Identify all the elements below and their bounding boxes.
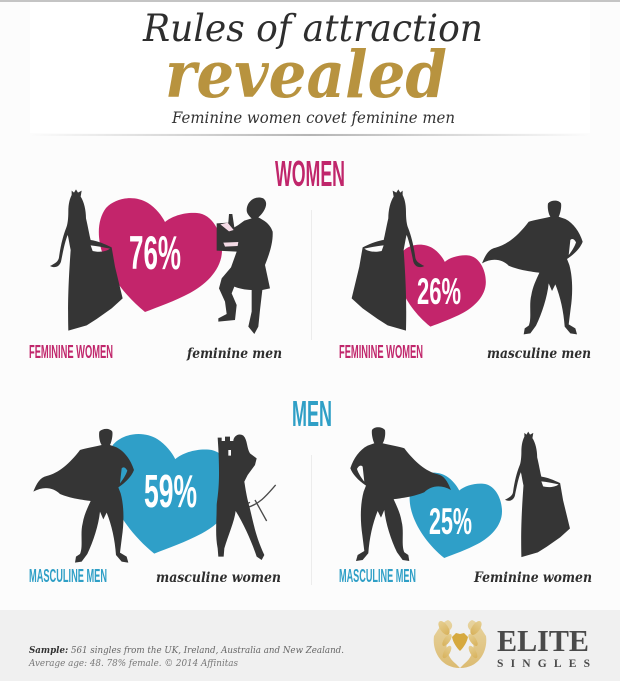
heading: men: MEN <box>292 393 332 434</box>
footer note: Average age: 48. 78% female. © 2014 Affinitas <box>28 658 238 669</box>
label: masculine men: masculine men <box>487 346 591 362</box>
label: feminine men: feminine men <box>186 346 282 362</box>
subtitle: Feminine women covet feminine men <box>171 109 455 127</box>
title <box>142 7 483 113</box>
icon: queen silhouette <box>505 432 570 557</box>
header band <box>0 0 620 136</box>
footer band <box>0 610 620 681</box>
panel: feminine women and masculine men 26% <box>339 189 591 362</box>
heart: 59% <box>106 434 235 554</box>
value: 25%: 25% <box>429 501 472 542</box>
icon: queen silhouette mirrored <box>352 189 424 331</box>
footer note: Sample: 561 singles from the UK, Ireland, Australia and New Zealand. <box>29 645 344 656</box>
value: 26%: 26% <box>417 271 461 312</box>
icon: caped hero silhouette <box>33 429 134 563</box>
footer note <box>28 645 344 669</box>
logo: elite singles <box>434 619 590 670</box>
title: Rules of attraction <box>142 7 483 50</box>
panel: masculine men and masculine women 59% <box>29 429 281 586</box>
panel: masculine men and feminine women 25% <box>339 427 592 586</box>
label: masculine women: masculine women <box>156 570 281 586</box>
value: 59%: 59% <box>144 465 197 517</box>
heart: 26% <box>397 245 486 327</box>
icon: minstrel silhouette <box>217 197 273 334</box>
label: feminine women: Feminine women <box>473 570 592 586</box>
icon: caped hero silhouette mirrored <box>350 427 451 561</box>
label: feminine women: FEMININE WOMEN <box>339 342 423 362</box>
panel: feminine women and feminine men 76% <box>29 189 282 362</box>
heart: 25% <box>410 473 502 558</box>
icon: gold laurel wreath <box>434 619 486 668</box>
icon: queen silhouette <box>50 189 123 331</box>
logo wordmark: ELITE <box>497 623 589 658</box>
icon: caped hero silhouette <box>482 201 583 334</box>
title: revealed <box>165 37 447 113</box>
heart: 76% <box>99 198 222 312</box>
label: feminine women: FEMININE WOMEN <box>29 342 113 362</box>
text: WOMEN <box>275 153 345 194</box>
icon: archer silhouette <box>216 434 276 560</box>
value: 76%: 76% <box>129 226 181 279</box>
logo subtitle: SINGLES <box>497 658 590 670</box>
label: masculine men: MASCULINE MEN <box>339 566 416 586</box>
label: masculine men: MASCULINE MEN <box>29 566 107 586</box>
